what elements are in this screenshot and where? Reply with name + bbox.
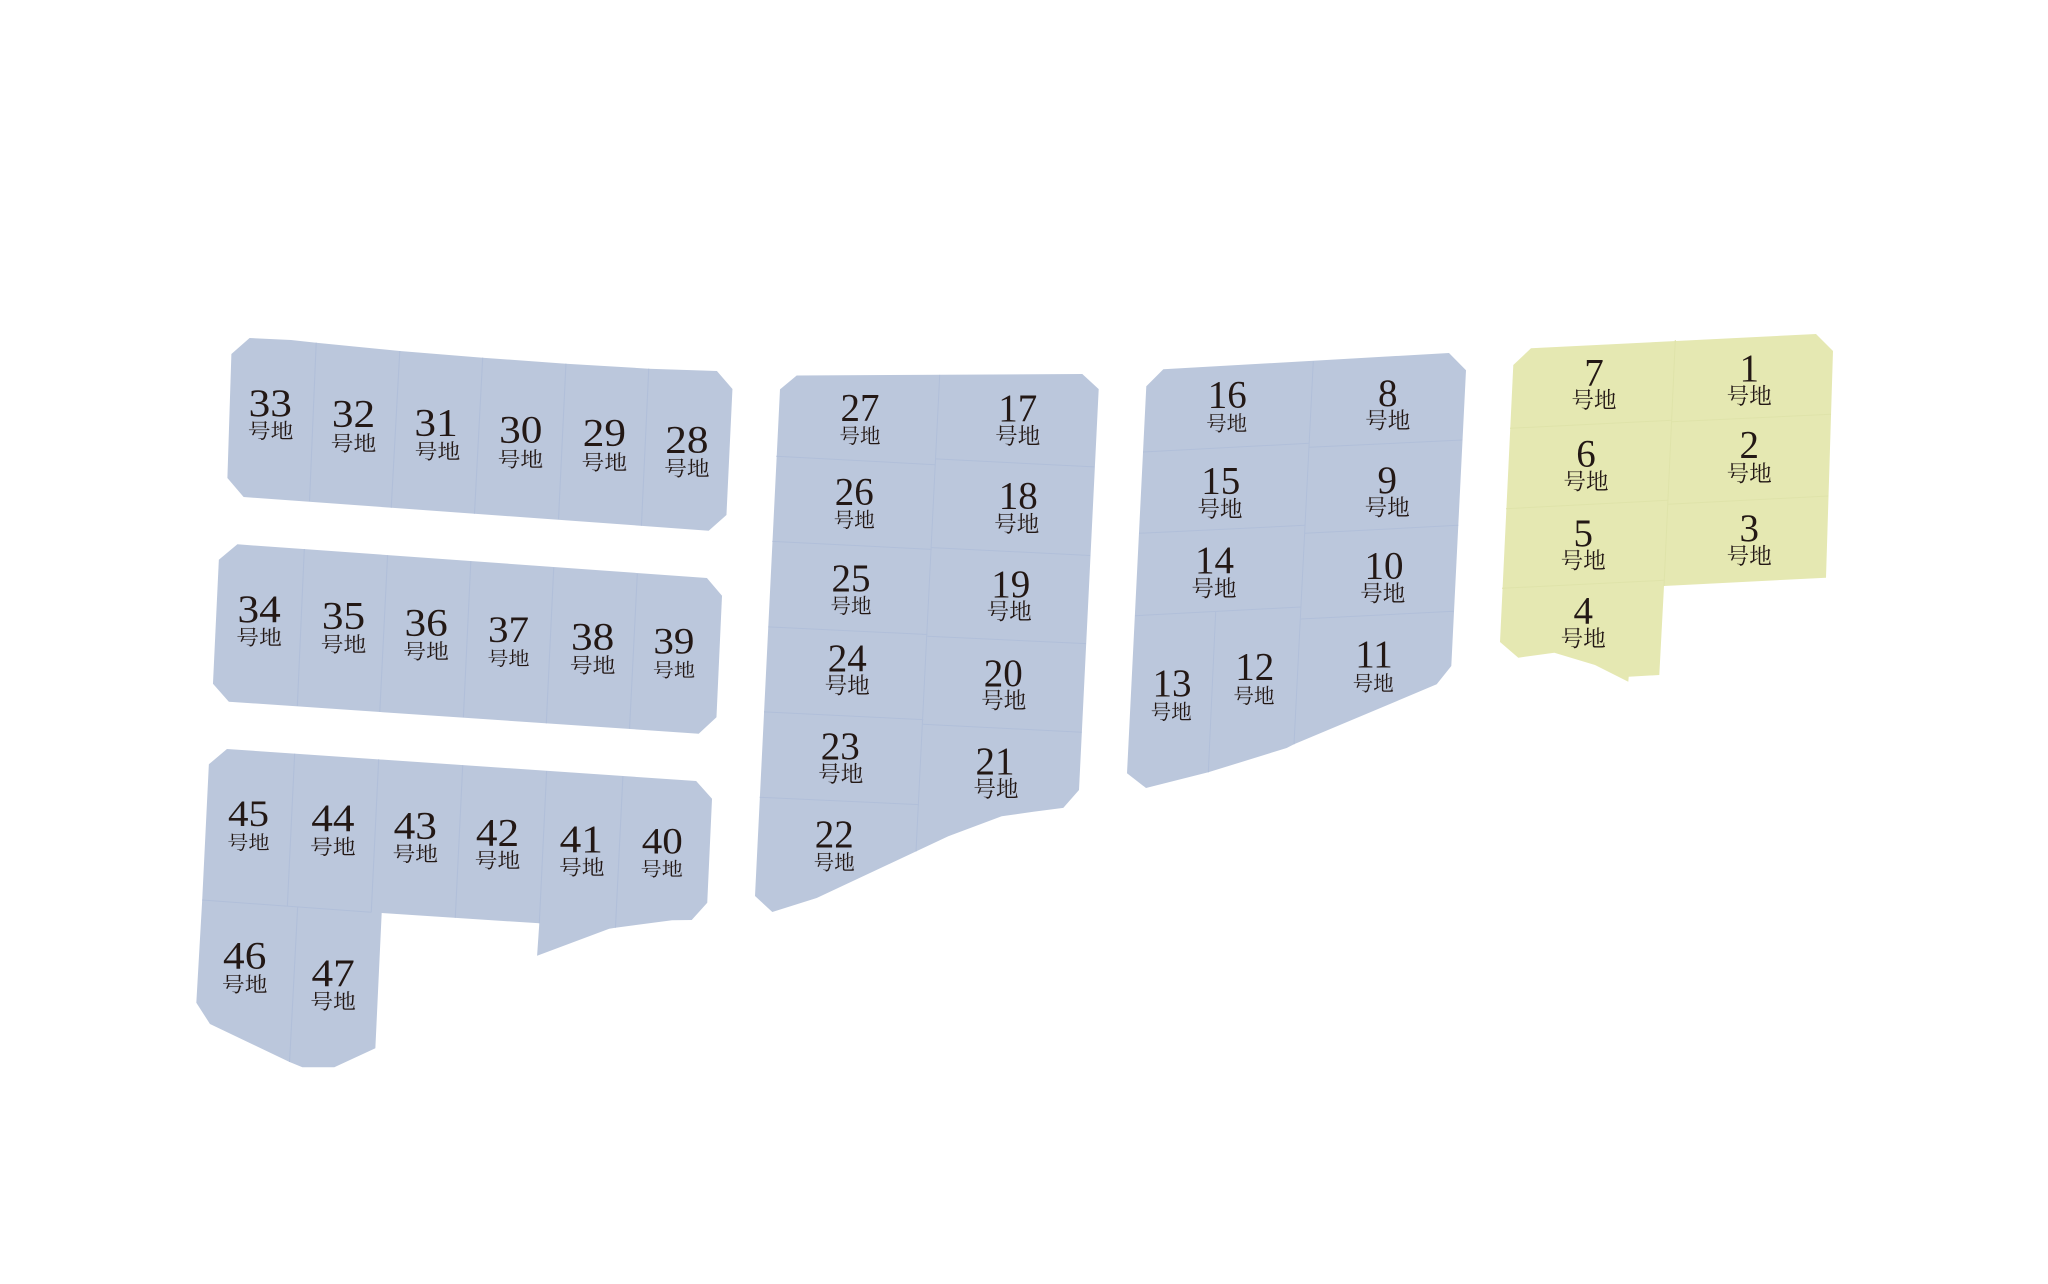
lot 18 — [994, 474, 1039, 537]
lot 41: 号地 — [559, 857, 605, 879]
lot 45: 号地 — [227, 832, 270, 854]
lot 33: 号地 — [248, 420, 293, 443]
lot 24: 号地 — [825, 673, 870, 698]
lot 29 — [582, 411, 627, 474]
lot 22 — [814, 813, 855, 875]
lot 8: 8 — [1378, 372, 1397, 415]
lot 19: 号地 — [987, 600, 1032, 625]
lot 36: 号地 — [403, 640, 449, 663]
lot 39: 号地 — [653, 660, 695, 681]
panel: block lots 17-27 — [755, 374, 1099, 912]
lot 6: 号地 — [1563, 470, 1609, 495]
lot 32: 号地 — [331, 433, 376, 455]
lot 38 — [570, 614, 615, 677]
lot 43: 号地 — [393, 843, 438, 866]
lot 41 — [559, 817, 605, 879]
lot 28: 28 — [665, 417, 709, 461]
lot 19 — [987, 563, 1032, 625]
lot 44: 44 — [311, 796, 354, 840]
panel: block lots 28-33 — [227, 338, 732, 531]
lot 41: 41 — [560, 817, 603, 861]
block shape 28-33 — [227, 338, 732, 531]
lot 19: 19 — [991, 563, 1030, 606]
lot 3: 号地 — [1727, 544, 1772, 569]
lot 32 — [331, 392, 376, 455]
lot 26 — [834, 470, 875, 532]
lot 40: 号地 — [641, 859, 683, 880]
lot 27: 号地 — [840, 425, 880, 448]
lot 46: 号地 — [222, 974, 267, 996]
lot 15: 号地 — [1197, 497, 1243, 522]
lot 35 — [321, 594, 366, 656]
lot 33: 33 — [249, 381, 292, 425]
lot 9: 号地 — [1365, 495, 1410, 520]
lot 38: 号地 — [570, 654, 615, 677]
lot 40: 40 — [642, 821, 683, 862]
lot 37: 37 — [488, 610, 529, 651]
lot 26: 号地 — [834, 509, 875, 532]
lot 39: 39 — [653, 621, 694, 662]
lot 21: 21 — [976, 740, 1014, 783]
lot 20: 号地 — [981, 689, 1026, 714]
lot 28: 号地 — [664, 457, 710, 480]
block shape 8-16 — [1127, 353, 1466, 788]
lot 13: 13 — [1152, 662, 1192, 705]
lot 16 — [1206, 374, 1247, 436]
lot 12: 12 — [1235, 646, 1274, 689]
lot 42 — [475, 810, 520, 872]
lot 2: 2 — [1740, 424, 1759, 467]
lot 11: 11 — [1355, 633, 1393, 676]
lot 43: 43 — [394, 803, 437, 847]
lot 14: 号地 — [1191, 576, 1237, 601]
lot 8: 号地 — [1365, 409, 1410, 434]
lot 7: 7 — [1584, 351, 1604, 394]
lot 15: 15 — [1201, 460, 1240, 503]
lot 26: 26 — [835, 470, 874, 513]
lot 31: 31 — [414, 401, 458, 444]
lot 17: 17 — [998, 387, 1037, 430]
block shape 1-7 — [1500, 334, 1833, 682]
lot 18: 18 — [999, 474, 1038, 517]
lot 3: 3 — [1740, 507, 1759, 550]
lot 23 — [818, 725, 863, 787]
lot 30: 30 — [499, 407, 542, 451]
lot 6: 6 — [1576, 432, 1596, 475]
lot 47: 47 — [312, 951, 355, 995]
lot 37: 号地 — [487, 648, 530, 670]
lot 29: 29 — [583, 411, 626, 454]
lot 10: 10 — [1364, 545, 1404, 588]
lot 36: 36 — [404, 600, 448, 644]
lot 22: 号地 — [814, 852, 855, 875]
lot 42: 42 — [476, 810, 519, 854]
lot 1 — [1727, 347, 1772, 409]
lot 44 — [310, 796, 356, 859]
lot 15 — [1197, 460, 1243, 522]
lot 46: 46 — [223, 934, 266, 977]
lot 1: 1 — [1740, 347, 1759, 390]
lot 40 — [641, 821, 683, 880]
lot 35: 35 — [322, 594, 365, 637]
lot 16: 16 — [1208, 374, 1247, 417]
lot 4: 4 — [1574, 590, 1593, 633]
lot 30: 号地 — [498, 449, 543, 471]
lot 8 — [1365, 372, 1410, 434]
lot 21 — [973, 740, 1019, 802]
lot 34: 号地 — [236, 627, 282, 649]
lot 27 — [840, 386, 880, 448]
lot 24: 24 — [828, 637, 867, 680]
lot 12 — [1234, 646, 1274, 708]
lot 14 — [1191, 539, 1237, 601]
lot 5 — [1561, 512, 1606, 574]
lot 11: 号地 — [1353, 672, 1394, 696]
lot 32: 32 — [332, 392, 375, 435]
lot 10 — [1360, 545, 1405, 606]
lot 12: 号地 — [1234, 685, 1274, 708]
block shape 40-47 — [196, 749, 712, 1067]
panel: block lots 40-47 — [196, 749, 712, 1067]
lot 37 — [487, 610, 530, 670]
lot 44: 号地 — [310, 836, 356, 859]
lot 25: 号地 — [830, 595, 872, 618]
lot 18: 号地 — [994, 512, 1039, 537]
lot 25 — [830, 557, 872, 618]
lot 38: 38 — [571, 614, 614, 658]
lot 23: 23 — [821, 725, 860, 768]
lot 46 — [222, 934, 267, 996]
lot 6 — [1563, 432, 1609, 495]
lot 17 — [995, 387, 1040, 449]
lot 20: 20 — [984, 652, 1023, 695]
lot 45 — [227, 794, 270, 854]
lot 31 — [414, 401, 460, 463]
lot 31: 号地 — [415, 441, 460, 463]
lot 30 — [498, 407, 543, 471]
lot 20 — [981, 652, 1026, 714]
lot 28 — [664, 417, 710, 480]
lot 13 — [1151, 662, 1192, 724]
lot 33 — [248, 381, 293, 443]
lot 7 — [1571, 351, 1617, 413]
lot 24 — [825, 637, 870, 698]
lot 4 — [1561, 590, 1606, 651]
lot 16: 号地 — [1206, 412, 1247, 436]
lot 1: 号地 — [1727, 384, 1772, 409]
lot 43 — [393, 803, 438, 866]
lot 9 — [1365, 459, 1410, 520]
lot 5: 5 — [1574, 512, 1593, 555]
block shape 17-27 — [755, 374, 1099, 912]
lot 11 — [1353, 633, 1394, 696]
lot 10: 号地 — [1360, 581, 1405, 606]
lot 21: 号地 — [973, 777, 1019, 802]
panel: block lots 8-16 — [1127, 353, 1466, 788]
lot 2: 号地 — [1727, 461, 1772, 486]
lot 2 — [1727, 424, 1772, 486]
lot 39 — [653, 621, 695, 681]
panel: highlighted block lots 1-7 — [1500, 334, 1833, 682]
lot 47 — [310, 951, 356, 1013]
lot 36 — [403, 600, 449, 663]
panel: block lots 34-39 — [213, 544, 722, 734]
lot 45: 45 — [228, 794, 269, 835]
lot 7: 号地 — [1571, 388, 1617, 413]
block shape 34-39 — [213, 544, 722, 734]
lot 14: 14 — [1195, 539, 1234, 582]
lot 17: 号地 — [995, 424, 1040, 449]
lot 29: 号地 — [582, 452, 627, 474]
lot 35: 号地 — [321, 633, 366, 656]
lot 47: 号地 — [310, 991, 356, 1013]
lot 25: 25 — [832, 557, 870, 600]
lot 3 — [1727, 507, 1772, 569]
lot 22: 22 — [815, 813, 854, 856]
lot 42: 号地 — [475, 850, 520, 872]
lot 23: 号地 — [818, 762, 863, 787]
lot 34 — [236, 587, 282, 649]
lot 13: 号地 — [1151, 701, 1192, 724]
lot 27: 27 — [840, 386, 880, 430]
lot 4: 号地 — [1561, 626, 1606, 651]
lot 5: 号地 — [1561, 549, 1606, 574]
lot 34: 34 — [238, 587, 281, 631]
lot 9: 9 — [1378, 459, 1397, 502]
